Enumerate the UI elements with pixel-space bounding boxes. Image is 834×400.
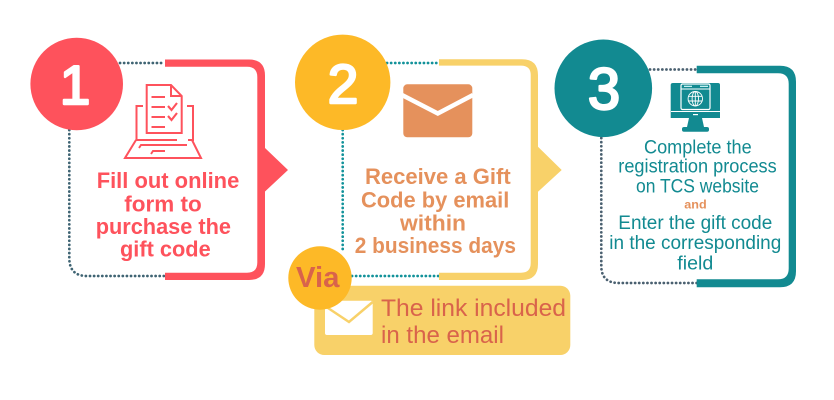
via badge [288, 246, 352, 310]
text: step 3 description: Complete the [644, 137, 752, 158]
number badge 2 [295, 35, 390, 130]
number badge 3 [554, 40, 652, 137]
text: and: and [684, 197, 707, 211]
text: step 3 description: Enter the gift code [618, 213, 772, 234]
text: step 1 description: form to [124, 192, 202, 216]
callout background [314, 286, 570, 355]
text: step 3 description: field [677, 253, 713, 274]
number badge 3: 3 [588, 57, 620, 122]
number badge 1: 1 [60, 54, 90, 116]
text: step 1 description: gift code [120, 237, 211, 262]
dotted border: step 1 [69, 63, 165, 276]
dotted border: step 3 [601, 70, 697, 283]
text: step 2 description [355, 164, 516, 258]
text: step 2 description: Code by email [361, 188, 509, 213]
text: step 3 description: on TCS website [636, 176, 759, 197]
text: step 3 description: registration process [618, 157, 777, 178]
text: step 1 description: purchase the [96, 214, 231, 239]
icon: monitor with globe [671, 83, 720, 132]
panel: step 2 [288, 35, 570, 355]
text: step 3 description: in the corresponding [609, 233, 781, 254]
bracket and arrow: step 2 [439, 59, 562, 280]
text: step 2 description: within [399, 211, 466, 236]
text: step 2 description: 2 business days [355, 233, 516, 258]
callout: via link in email [288, 246, 570, 355]
text: link description [381, 295, 566, 349]
number badge 1 [30, 38, 123, 130]
icon: small white envelope [325, 301, 373, 335]
text: step 2 description: Receive a Gift [365, 164, 511, 189]
text: link description: in the email [381, 322, 504, 349]
icon: envelope [402, 84, 473, 137]
bracket: step 3 [697, 66, 796, 287]
text: step 1 description: Fill out online [97, 168, 239, 193]
text: step 3 description [609, 137, 781, 274]
panel: step 1 [30, 38, 288, 280]
via badge: Via [296, 262, 340, 294]
dotted border: step 2 [343, 63, 439, 276]
text: link description: The link included [381, 295, 566, 322]
icon: laptop with checklist [125, 85, 201, 158]
panel: step 3 [554, 40, 796, 287]
bracket and arrow: step 1 [165, 60, 288, 280]
text: step 1 description [96, 168, 239, 262]
number badge 2: 2 [328, 53, 358, 115]
